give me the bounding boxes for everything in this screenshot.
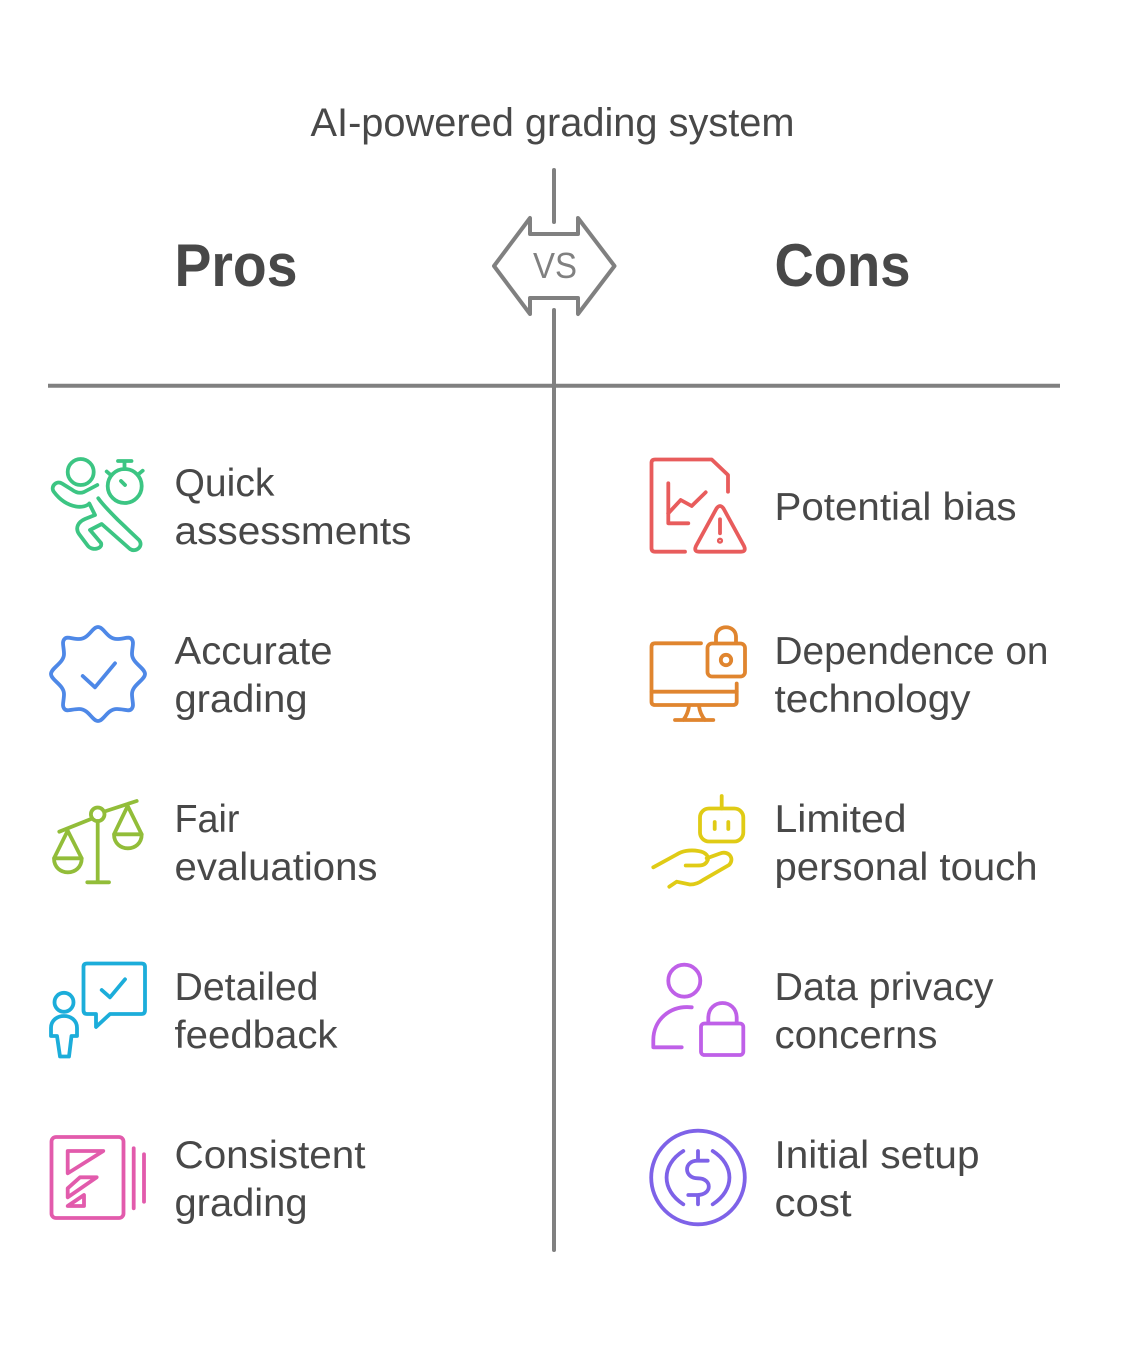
text: accurate grading: Accurate [174, 630, 332, 673]
icon: consistent logo panel [52, 1137, 144, 1218]
text: accurate grading: grading [174, 678, 308, 721]
icon: scales [54, 801, 142, 882]
text: limited personal touch: personal touch [774, 846, 1038, 889]
icon: hand holding robot [653, 796, 743, 887]
text: quick assessments: Quick [174, 462, 275, 505]
text: consistent grading [174, 1134, 366, 1225]
text: consistent grading: grading [174, 1182, 308, 1225]
text: data privacy concerns: Data privacy [774, 966, 994, 1009]
title: AI-powered grading system [310, 101, 794, 145]
icon: monitor with lock [652, 627, 745, 720]
heading: pros: Pros [174, 232, 298, 299]
heading: cons: Cons [774, 232, 910, 299]
icon: person with lock [653, 965, 743, 1055]
text: fair evaluations: Fair [174, 798, 240, 841]
text: data privacy concerns: concerns [774, 1014, 938, 1057]
text: data privacy concerns [774, 966, 994, 1057]
text: limited personal touch: Limited [774, 798, 906, 841]
vs badge: VS [533, 245, 577, 286]
text: detailed feedback [174, 966, 338, 1057]
text: accurate grading [174, 630, 332, 721]
text: fair evaluations [174, 798, 378, 889]
vertical divider [552, 310, 556, 1250]
horizontal divider [48, 384, 1060, 388]
text: initial setup cost: Initial setup [774, 1134, 980, 1177]
vs badge [494, 218, 614, 314]
icon: person with feedback bubble [51, 964, 145, 1056]
text: dependence on technology: technology [774, 678, 971, 721]
icon: runner with stopwatch [53, 459, 143, 550]
text: potential bias: Potential bias [774, 486, 1016, 529]
text: dependence on technology [774, 630, 1048, 721]
icon: verified badge [51, 627, 145, 721]
text: limited personal touch [774, 798, 1038, 889]
text: detailed feedback: Detailed [174, 966, 318, 1009]
vertical divider top [552, 170, 556, 222]
text: initial setup cost: cost [774, 1182, 852, 1225]
text: initial setup cost [774, 1134, 980, 1225]
text: dependence on technology: Dependence on [774, 630, 1048, 673]
text: quick assessments: assessments [174, 510, 412, 553]
text: fair evaluations: evaluations [174, 846, 378, 889]
text: detailed feedback: feedback [174, 1014, 338, 1057]
icon: report with warning [652, 460, 745, 552]
icon: dollar coin [651, 1131, 745, 1224]
text: quick assessments [174, 462, 412, 553]
text: consistent grading: Consistent [174, 1134, 366, 1177]
